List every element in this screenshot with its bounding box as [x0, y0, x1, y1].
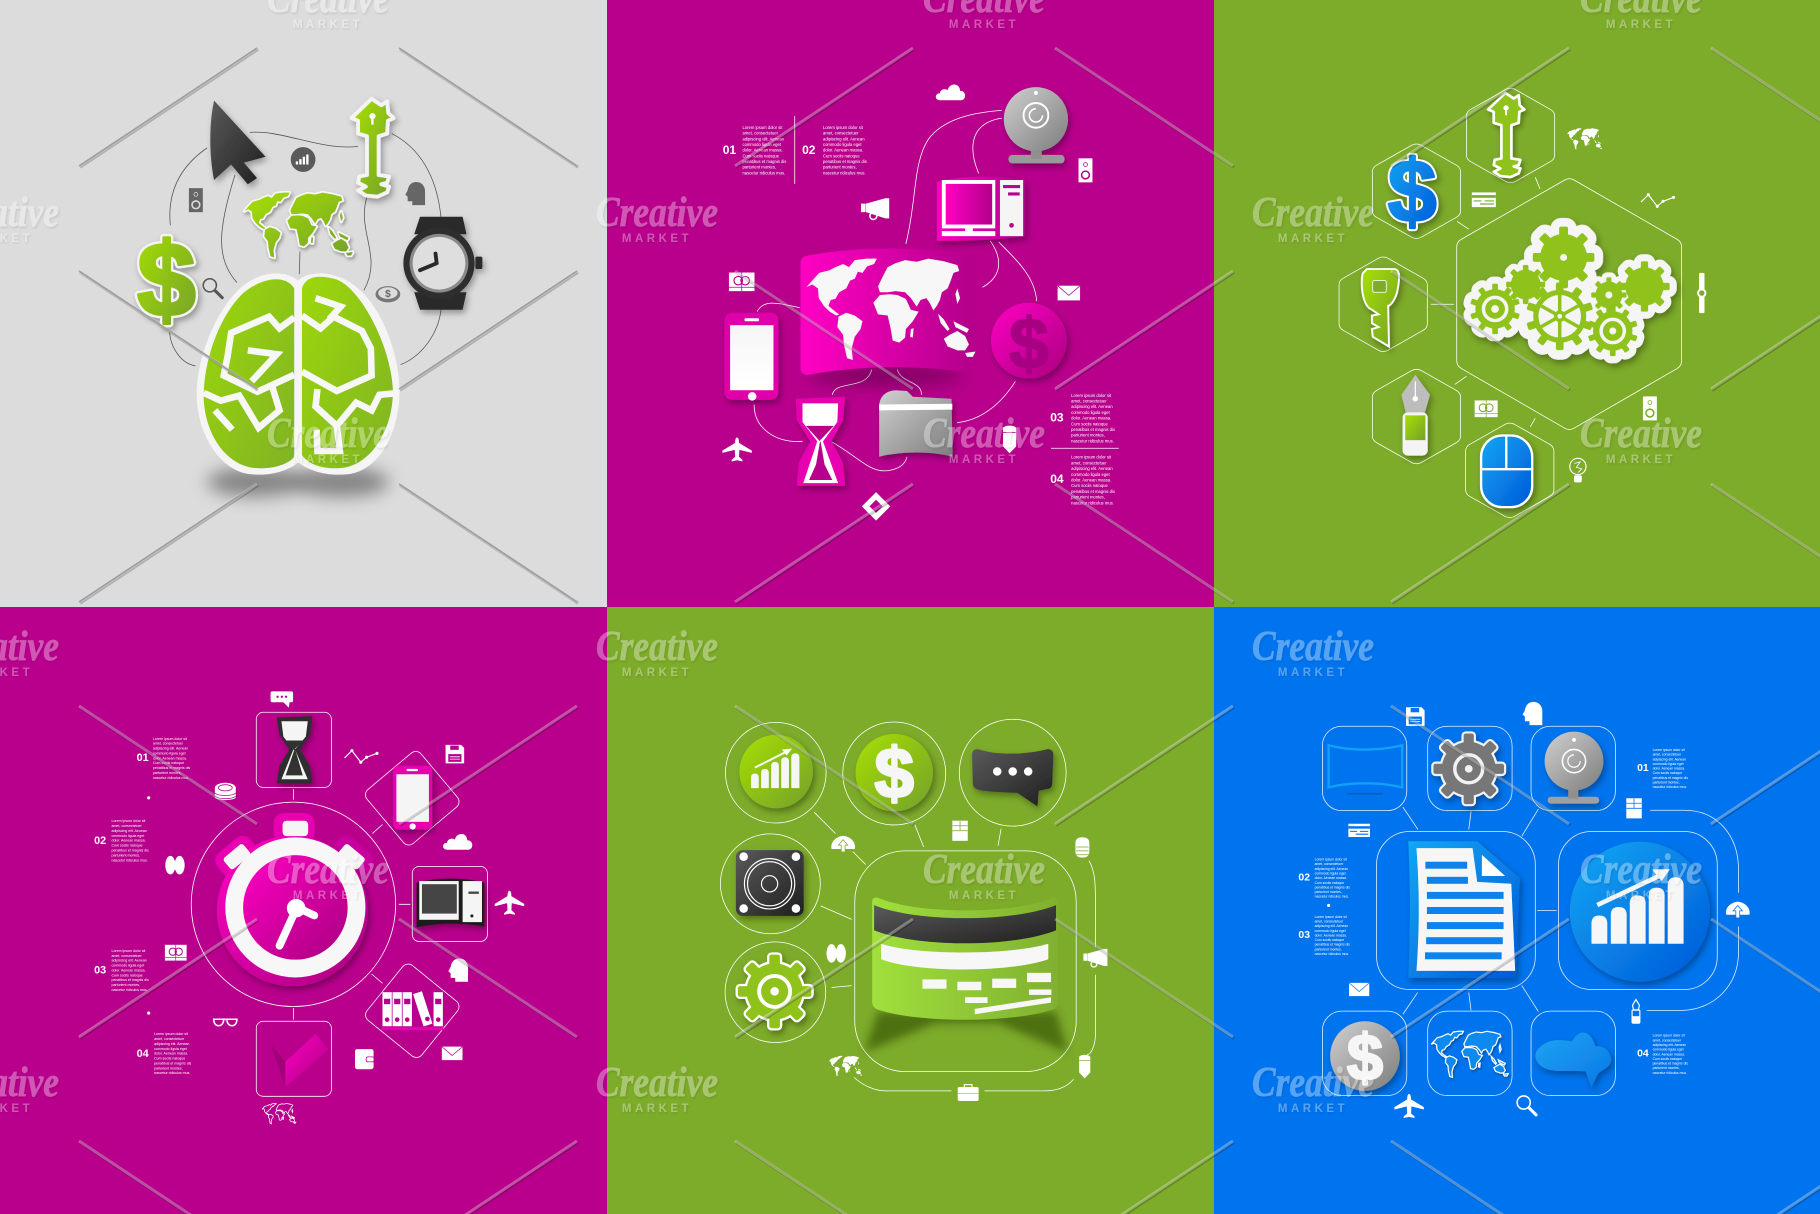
text block 04: adipiscing elit. Aenean — [154, 1042, 189, 1046]
text block 03: nascetur ridiculus mus. — [111, 988, 148, 992]
text block 03: 03 — [94, 965, 106, 977]
timeline dots — [147, 796, 150, 1015]
icon: world map — [1431, 1031, 1508, 1077]
icon: head — [1523, 702, 1542, 725]
icon: desktop computer — [937, 176, 1025, 241]
text block 02: Lorem ipsum dolor sit — [1315, 858, 1347, 862]
text block 01: penatibus et magnis dis — [1653, 776, 1688, 780]
icon: hourglass — [277, 716, 312, 784]
text block 01: 01 — [723, 143, 736, 157]
icon: world map sticker — [245, 193, 353, 258]
icon: cursor arrow — [210, 101, 266, 184]
icon: dollar coin — [991, 303, 1067, 384]
text block 02: Cum sociis natoque — [111, 844, 143, 848]
icon: coin stack — [1075, 837, 1089, 857]
icon: envelope — [442, 1047, 462, 1060]
text block 04: Cum sociis natoque — [1071, 483, 1108, 488]
watermarks: Creative — [923, 847, 1045, 893]
icon: bank card — [1348, 824, 1370, 837]
gears sticker cluster — [1470, 227, 1670, 356]
watermarks: Creative — [1252, 190, 1374, 236]
icon: head — [448, 959, 468, 982]
text block 02: amet, consectetuer — [823, 131, 859, 136]
panel: credit card on green — [607, 607, 1214, 1214]
icon: cloud — [936, 84, 965, 100]
text block 01: Cum sociis natoque — [742, 153, 780, 158]
text block 03: dolor. Aenean massa. — [111, 968, 146, 972]
text block 03: adipiscing elit. Aenean — [1071, 404, 1113, 409]
icon: wristwatch mini — [1697, 273, 1706, 313]
text block 01: penatibus et magnis dis — [153, 766, 190, 770]
text block 01: adipiscing elit. Aenean — [1653, 757, 1686, 761]
icon: growth chart badge — [1570, 842, 1710, 982]
icon: marker pencil — [1079, 1055, 1090, 1078]
text block 01: penatibus et magnis dis — [742, 159, 786, 164]
icon: smartphone — [393, 766, 432, 830]
text block 01 — [137, 737, 190, 780]
watermarks: Creative — [267, 411, 389, 457]
text block 03: parturient montes, — [1315, 947, 1342, 951]
text block 02: Lorem ipsum dolor sit — [823, 125, 864, 130]
icon: speech bubble — [271, 691, 293, 708]
icon: briefcase — [958, 1085, 979, 1101]
text block 03: dolor. Aenean massa. — [1071, 416, 1111, 421]
text block 01: adipiscing elit. Aenean — [153, 747, 188, 751]
icon: floppy disk — [446, 745, 464, 763]
text block 03: penatibus et magnis dis — [1315, 943, 1350, 947]
text block 04: 04 — [1637, 1048, 1649, 1059]
stopwatch — [211, 813, 377, 986]
text block 02: adipiscing elit. Aenean — [823, 136, 865, 141]
text block 03 — [94, 949, 149, 992]
panel: brain on gray — [0, 0, 607, 607]
icon: money bills — [729, 273, 754, 291]
icon: megaphone — [1083, 949, 1107, 967]
text block 04: commodo ligula eget — [1071, 472, 1110, 477]
watermarks: Creative — [1580, 411, 1702, 457]
icon: bank card — [1472, 192, 1496, 207]
text block 01: parturient montes, — [1653, 781, 1680, 785]
icon: dollar sticker: $ — [137, 222, 196, 339]
icon: hourglass — [796, 397, 845, 486]
icon: marker pencil — [1003, 426, 1016, 453]
text block 02: dolor. Aenean massa. — [111, 839, 146, 843]
icon: monitor outline — [1329, 745, 1402, 795]
text block 03: 03 — [1050, 411, 1064, 425]
icon: smartphone — [724, 313, 778, 401]
text block 02: Lorem ipsum dolor sit — [111, 819, 145, 823]
icon: dollar sticker: $ — [137, 222, 196, 339]
icon: cloud — [443, 834, 472, 850]
text block 02: 02 — [802, 143, 816, 157]
text block 02: 02 — [94, 835, 106, 847]
text block 02: nascetur ridiculus mus. — [111, 858, 148, 862]
watermarks: MARKET — [1278, 233, 1348, 245]
text block 04 — [137, 1032, 192, 1075]
icon: brain mini — [165, 856, 185, 874]
watermarks: MARKET — [1606, 890, 1676, 902]
panel: stopwatch on magenta — [0, 607, 607, 1214]
text block 03: amet, consectetuer — [1071, 398, 1107, 403]
text block 04: nascetur ridiculus mus. — [154, 1071, 190, 1075]
text block 03: parturient montes, — [1071, 433, 1105, 438]
text block 04: Lorem ipsum dolor sit — [154, 1032, 188, 1036]
text block 03: adipiscing elit. Aenean — [111, 959, 147, 963]
text block 02: Cum sociis natoque — [823, 153, 860, 158]
text block 01: 01 — [137, 752, 149, 764]
text block 03: adipiscing elit. Aenean — [1315, 924, 1348, 928]
icon: speaker — [189, 188, 203, 212]
text block 03: nascetur ridiculus mus. — [1071, 438, 1114, 443]
text block 04: dolor. Aenean massa. — [1653, 1052, 1685, 1056]
text block 03: parturient montes, — [111, 983, 140, 987]
text block 03: amet, consectetuer — [1315, 920, 1344, 924]
text block 02: penatibus et magnis dis — [1315, 885, 1350, 889]
text block 03: commodo ligula eget — [1071, 410, 1110, 415]
text block 01: amet, consectetuer — [742, 131, 779, 136]
icon: gift box — [952, 821, 968, 841]
icon: loudspeaker — [736, 850, 804, 916]
text block 04 — [1637, 1034, 1688, 1075]
icon: checkmark — [271, 1034, 329, 1087]
text block 01: commodo ligula eget — [153, 751, 186, 755]
text block 01: Lorem ipsum dolor sit — [1653, 748, 1685, 752]
text block 04: nascetur ridiculus mus. — [1653, 1071, 1687, 1075]
icon: magnifier — [203, 279, 222, 298]
text block 04: Cum sociis natoque — [154, 1057, 185, 1061]
text block 04: 04 — [137, 1048, 149, 1060]
icon: small world map — [828, 1056, 862, 1076]
text block 04: parturient montes, — [1653, 1066, 1680, 1070]
icon: small world map — [1567, 128, 1602, 150]
icon: magnifier — [1517, 1096, 1536, 1115]
text block 02: nascetur ridiculus mus. — [823, 170, 866, 175]
icon: binders — [381, 991, 443, 1030]
text block 04: commodo ligula eget — [154, 1047, 187, 1051]
icon: airplane — [1394, 1094, 1424, 1118]
text block 01: commodo ligula eget — [742, 142, 782, 147]
panel: gears on green — [1214, 0, 1820, 607]
text block 01: nascetur ridiculus mus. — [1653, 785, 1687, 789]
text block 01: amet, consectetuer — [1653, 753, 1682, 757]
text block 02 — [1298, 858, 1350, 899]
icon: house key — [1488, 93, 1524, 177]
text block 04: penatibus et magnis dis — [154, 1061, 192, 1065]
credit card — [872, 897, 1058, 1020]
icon: gray dollar coin: $ — [1347, 1020, 1383, 1093]
icon: diamond knot — [866, 496, 886, 517]
text block 01: dolor. Aenean massa. — [153, 756, 187, 760]
text block 03: nascetur ridiculus mus. — [1315, 952, 1349, 956]
icon: airplane — [722, 437, 752, 461]
text block 01 — [1637, 748, 1688, 789]
text block 01: adipiscing elit. Aenean — [742, 136, 785, 141]
hexagon frames and connectors — [1339, 88, 1682, 518]
icon: airplane — [495, 891, 524, 915]
watermarks: Creative — [1580, 847, 1702, 893]
text block 04: dolor. Aenean massa. — [154, 1052, 188, 1056]
watermarks: Creative — [596, 190, 718, 236]
icon: line chart — [345, 749, 379, 764]
text block 02: parturient montes, — [1315, 890, 1342, 894]
text block 03: commodo ligula eget — [111, 964, 144, 968]
watermarks: Creative — [596, 624, 718, 670]
icon: envelope — [1058, 286, 1080, 300]
text block 01: nascetur ridiculus mus. — [153, 776, 189, 780]
watermarks: Creative — [1252, 1060, 1374, 1106]
icon: glasses — [213, 1019, 238, 1026]
text block 03: Lorem ipsum dolor sit — [111, 949, 145, 953]
text block 03: Cum sociis natoque — [111, 973, 143, 977]
text block 03: dolor. Aenean massa. — [1315, 933, 1347, 937]
text block 04: nascetur ridiculus mus. — [1071, 500, 1114, 505]
text block 01: amet, consectetuer — [153, 742, 184, 746]
icon: floppy disk — [1406, 707, 1425, 726]
icon: blue speech bubble — [1535, 1032, 1611, 1087]
text block 03: penatibus et magnis dis — [1071, 427, 1115, 432]
text block 04: amet, consectetuer — [1653, 1038, 1682, 1042]
icon: head — [405, 182, 425, 205]
watermarks: MARKET — [293, 19, 363, 31]
watermarks: MARKET — [622, 1103, 692, 1115]
panel: document and chart on blue — [1214, 607, 1820, 1214]
icon: blue dollar: $ — [1388, 141, 1437, 240]
icon: money bills — [1475, 400, 1498, 417]
text block 02: dolor. Aenean massa. — [1315, 876, 1347, 880]
icon: money bills — [165, 945, 187, 961]
icon: house key — [352, 99, 394, 197]
panel: world map on magenta — [607, 0, 1214, 607]
icon: speaker — [1643, 396, 1657, 420]
text block 02: parturient montes, — [111, 853, 140, 857]
icon: gear — [738, 955, 811, 1028]
watermarks: Creative — [596, 1060, 718, 1106]
watermarks: Creative — [923, 411, 1045, 457]
watermarks: MARKET — [1278, 1103, 1348, 1115]
watermarks: MARKET — [1606, 454, 1676, 466]
watermarks: Creative — [267, 847, 389, 893]
text block 04: penatibus et magnis dis — [1071, 489, 1115, 494]
text block 03: amet, consectetuer — [111, 954, 142, 958]
icon: chart badge — [291, 147, 316, 172]
text block 04 — [1050, 455, 1115, 505]
icon: coin — [376, 286, 400, 302]
icon: desktop computer — [417, 879, 484, 928]
text block 02: nascetur ridiculus mus. — [1315, 895, 1349, 899]
text block 03: commodo ligula eget — [1315, 929, 1346, 933]
frames and connectors — [191, 712, 487, 1096]
icon: wallet — [355, 1049, 374, 1069]
text block 03: Lorem ipsum dolor sit — [1071, 393, 1112, 398]
text block 01: dolor. Aenean massa. — [1653, 767, 1685, 771]
icon: brain mini — [826, 944, 846, 963]
text block 04: Lorem ipsum dolor sit — [1071, 455, 1112, 460]
brain sticker — [197, 273, 400, 475]
text block 04: amet, consectetuer — [154, 1037, 185, 1041]
text block 02 — [94, 819, 149, 862]
text block 02: parturient montes, — [823, 165, 857, 170]
watermarks: MARKET — [293, 454, 363, 466]
icon: line chart — [1641, 193, 1675, 208]
frames and connectors — [720, 719, 1096, 1091]
text block 03 — [1050, 393, 1115, 443]
icon: webcam — [1004, 87, 1068, 163]
icon: speaker — [1079, 158, 1092, 182]
icon: gray dollar coin — [1330, 1020, 1400, 1093]
text block 03: penatibus et magnis dis — [111, 978, 149, 982]
icon: coin: $ — [385, 289, 391, 300]
text block 01: Lorem ipsum dolor sit — [153, 737, 187, 741]
text block 04: commodo ligula eget — [1653, 1048, 1684, 1052]
text block 04: adipiscing elit. Aenean — [1071, 466, 1113, 471]
icon: envelope — [1349, 983, 1369, 996]
watermarks: MARKET — [622, 233, 692, 245]
watermarks: MARKET — [1278, 667, 1348, 679]
icon: document — [1408, 841, 1520, 978]
watermarks: MARKET — [622, 667, 692, 679]
icon: gift box — [1626, 798, 1642, 818]
icon: dollar badge: $ — [875, 733, 914, 812]
icon: black speech bubble — [972, 749, 1053, 806]
text block 02: amet, consectetuer — [1315, 862, 1344, 866]
icon: wristwatch — [403, 217, 482, 310]
text block 01: Cum sociis natoque — [1653, 771, 1682, 775]
icon: folder — [879, 390, 953, 457]
card shadow — [864, 1012, 1068, 1052]
text block 01: commodo ligula eget — [1653, 762, 1684, 766]
connector lines — [170, 132, 441, 366]
text block 02: adipiscing elit. Aenean — [111, 829, 147, 833]
text block 04: parturient montes, — [154, 1066, 183, 1070]
text block 04: Cum sociis natoque — [1653, 1057, 1682, 1061]
text block 02: 02 — [1298, 873, 1310, 884]
shadow under brain — [207, 467, 389, 497]
frames and connectors — [1322, 726, 1739, 1096]
icon: computer mouse — [1481, 436, 1532, 507]
text block 01: parturient montes, — [742, 165, 776, 170]
icon: world map outline — [262, 1104, 296, 1124]
icon: megaphone — [861, 198, 889, 219]
icon: light bulb — [1570, 458, 1586, 482]
text block 02: adipiscing elit. Aenean — [1315, 867, 1348, 871]
connector lines — [754, 110, 1119, 471]
text block 04: adipiscing elit. Aenean — [1653, 1043, 1686, 1047]
text block 02: penatibus et magnis dis — [111, 849, 149, 853]
text block 04: dolor. Aenean massa. — [1071, 477, 1111, 482]
icon: dollar coin: $ — [1009, 304, 1049, 384]
text block 04: parturient montes, — [1071, 495, 1105, 500]
text block 01: Cum sociis natoque — [153, 761, 184, 765]
text block 03 — [1298, 915, 1350, 956]
text block 01: 01 — [1637, 763, 1649, 774]
icon: door key — [1362, 269, 1399, 346]
text block 02 — [802, 125, 867, 175]
watermarks: MARKET — [1606, 19, 1676, 31]
text block 04: Lorem ipsum dolor sit — [1653, 1034, 1685, 1038]
text block 02: commodo ligula eget — [111, 834, 144, 838]
text block 03: Cum sociis natoque — [1315, 938, 1344, 942]
text block 03: Lorem ipsum dolor sit — [1315, 915, 1347, 919]
icon: gray gear — [1433, 734, 1504, 804]
icon: chart badge — [739, 735, 813, 808]
text block 03: Cum sociis natoque — [1071, 421, 1108, 426]
text block 01: Lorem ipsum dolor sit — [742, 125, 783, 130]
text block 01 — [723, 125, 786, 175]
watermarks: MARKET — [949, 454, 1019, 466]
shadow under world map — [808, 365, 963, 386]
watermarks: MARKET — [293, 890, 363, 902]
separator dot — [1327, 904, 1330, 907]
text block 04: amet, consectetuer — [1071, 460, 1107, 465]
watermarks: MARKET — [949, 890, 1019, 902]
icon: fountain pen — [1632, 1000, 1640, 1023]
icon: cloud upload — [1726, 902, 1750, 918]
watermarks: Creative — [1252, 624, 1374, 670]
text block 02: Cum sociis natoque — [1315, 881, 1344, 885]
icon: webcam — [1545, 732, 1603, 804]
text block 04: penatibus et magnis dis — [1653, 1062, 1688, 1066]
text block 02: dolor. Aenean massa. — [823, 148, 863, 153]
text block 01: nascetur ridiculus mus. — [742, 170, 785, 175]
text block 02: amet, consectetuer — [111, 824, 142, 828]
icon: cloud upload — [831, 836, 855, 852]
icon: dollar badge — [856, 733, 933, 812]
text block 01: parturient montes, — [153, 771, 182, 775]
text block 01: dolor. Aenean massa. — [742, 148, 783, 153]
text block 04: 04 — [1050, 472, 1064, 486]
watermarks: MARKET — [949, 19, 1019, 31]
icon: blue dollar: $ — [1388, 141, 1437, 240]
text block 02: commodo ligula eget — [1315, 871, 1346, 875]
text block 02: penatibus et magnis dis — [823, 159, 867, 164]
text block 03: 03 — [1298, 930, 1310, 941]
icon: fountain pen — [1401, 375, 1430, 456]
text block 02: commodo ligula eget — [823, 142, 862, 147]
icon: coins — [215, 783, 236, 800]
world map card — [801, 249, 976, 375]
